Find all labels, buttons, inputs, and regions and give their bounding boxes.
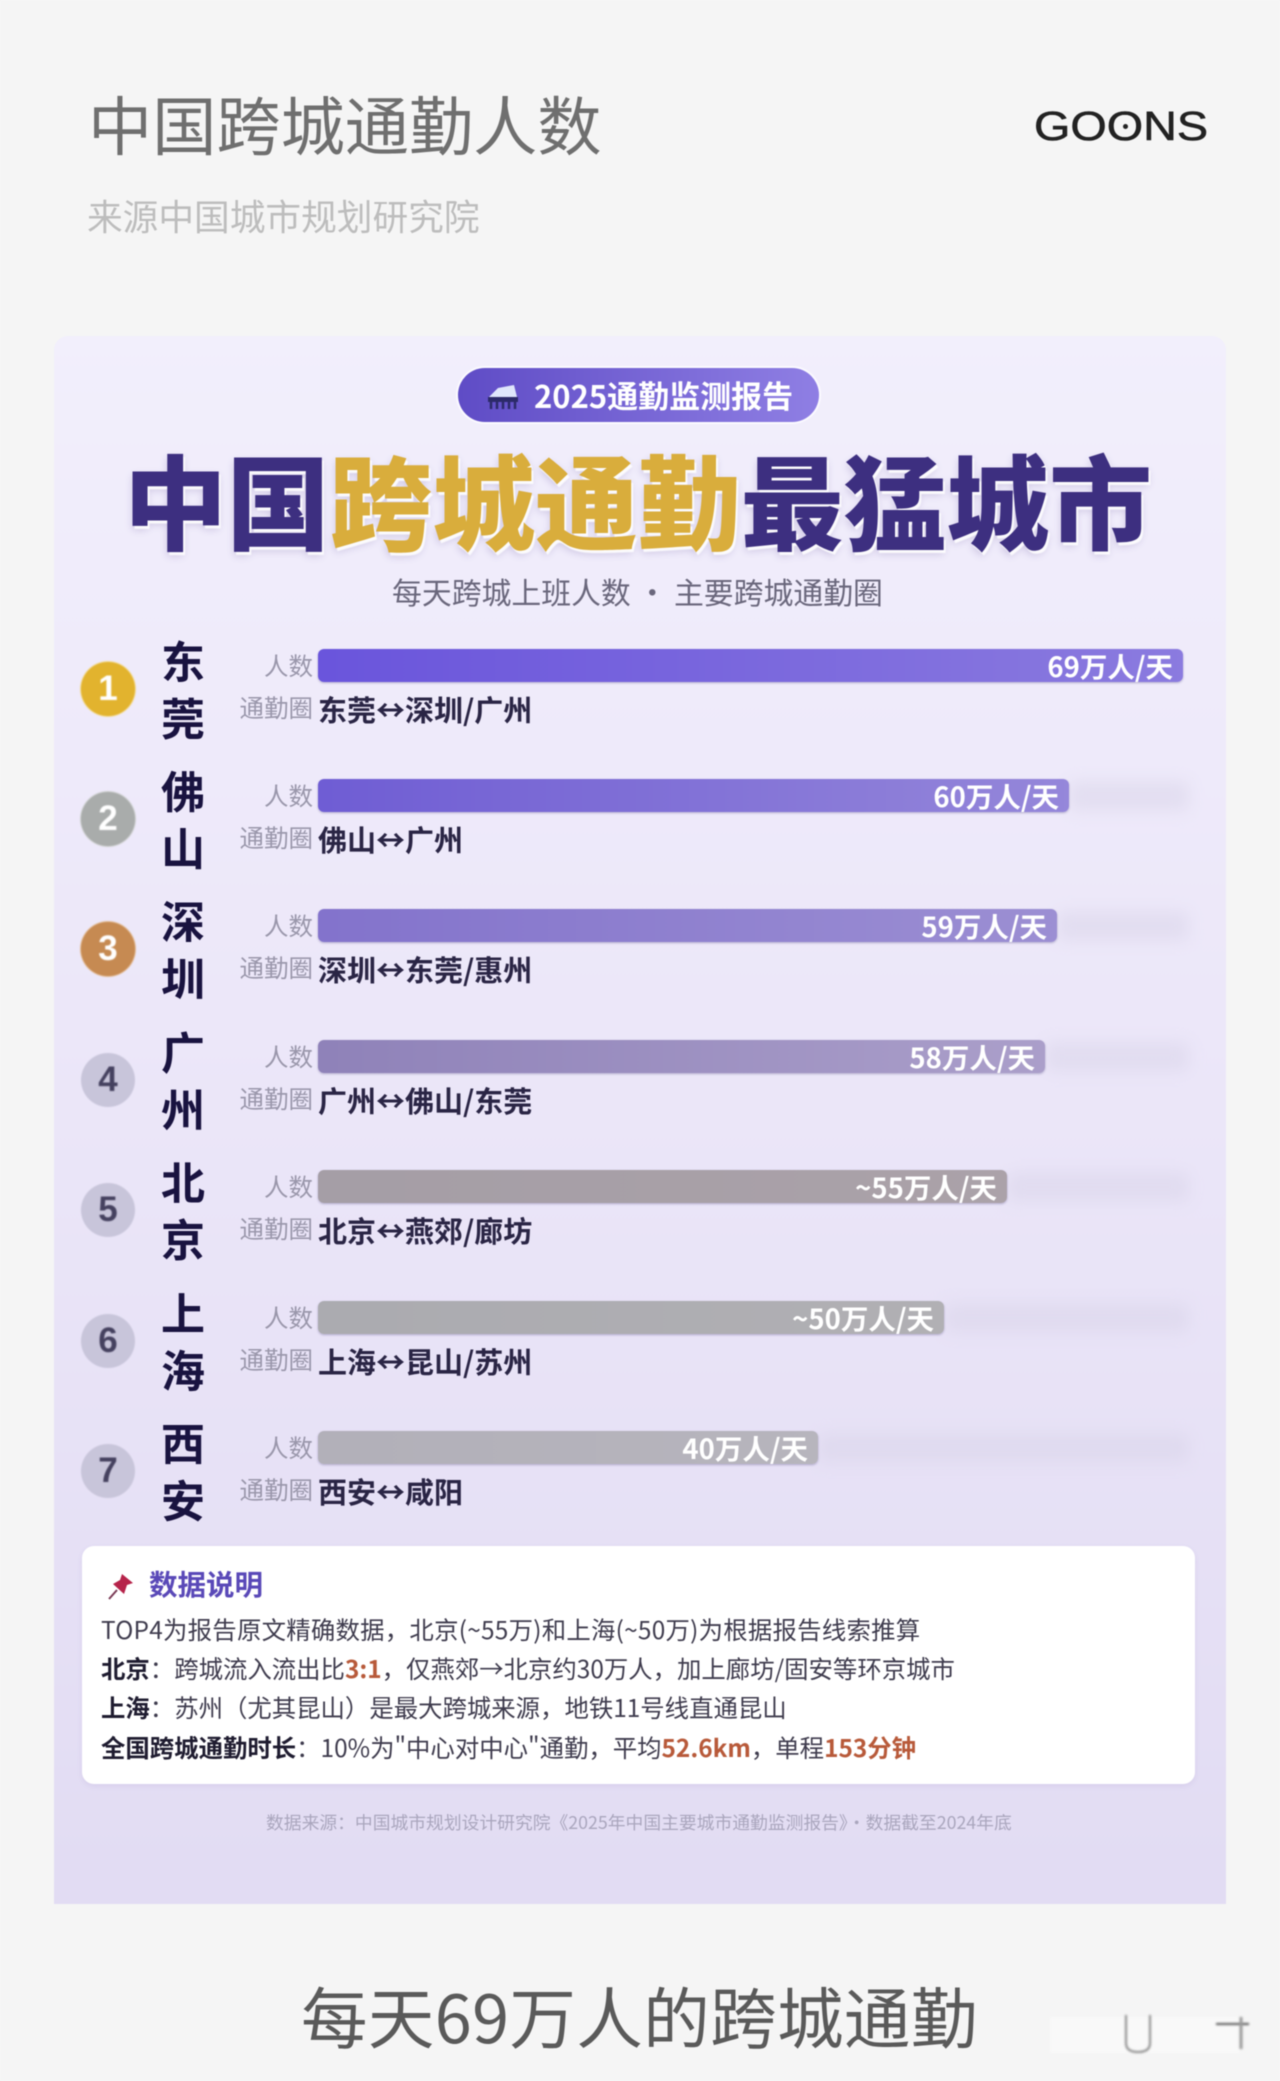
rank badge 6: 6 — [98, 1321, 118, 1360]
rank badge 2 — [81, 792, 135, 846]
city name: 深 — [161, 887, 205, 951]
caption: 每天69万人的跨城通勤 — [301, 1967, 978, 2063]
icon: pin — [108, 1574, 134, 1600]
row 6: 上海 — [80, 1279, 1170, 1400]
label: people: 人数 — [264, 778, 313, 813]
subheading: 每天跨城上班人数 · 主要跨城通勤圈 — [392, 569, 883, 613]
route: 东莞↔深圳/广州 — [318, 688, 532, 730]
bar: 55万: ~55万人/天 — [855, 1166, 997, 1206]
city name: 佛 — [161, 757, 205, 821]
blurred track — [1007, 1172, 1189, 1202]
rank badge 5 — [81, 1183, 135, 1237]
subtitle: source: 来源中国城市规划研究院 — [87, 190, 480, 241]
rank badge 1: 1 — [98, 669, 118, 708]
rank badge 1 — [81, 662, 135, 716]
bar: 40万 — [318, 1431, 818, 1464]
rank badge 2: 2 — [98, 799, 118, 838]
label: circle: 通勤圈 — [240, 1342, 313, 1377]
main heading: 中国跨城通勤最猛城市 — [124, 423, 1152, 572]
label: people: 人数 — [264, 1430, 313, 1465]
city name — [161, 887, 205, 1008]
bar: 69万: 69万人/天 — [1047, 645, 1173, 685]
label: people: 人数 — [264, 908, 313, 943]
city name: 山 — [161, 814, 205, 878]
bar: 58万: 58万人/天 — [909, 1036, 1035, 1076]
bar: 55万 — [318, 1170, 1007, 1203]
note line 3: 上海：苏州（尤其昆山）是最大跨城来源，地铁11号线直通昆山 — [101, 1690, 787, 1725]
note line 1: TOP4为报告原文精确数据，北京(~55万)和上海(~50万)为根据报告线索推算 — [101, 1612, 920, 1647]
city name: 北 — [161, 1148, 205, 1212]
city name — [161, 1279, 205, 1400]
label: circle: 通勤圈 — [240, 950, 313, 985]
bar: 60万: 60万人/天 — [933, 775, 1059, 815]
city name: 圳 — [161, 944, 205, 1008]
row 3: 深圳 — [79, 887, 1182, 1008]
source line: 数据来源：中国城市规划设计研究院《2025年中国主要城市通勤监测报告》·数据截至2024年底 — [266, 1809, 1012, 1835]
note line 4: 全国跨城通勤时长：10%为"中心对中心"通勤，平均52.6km，单程153分钟 — [101, 1730, 916, 1765]
bar: 50万: ~50万人/天 — [792, 1297, 934, 1337]
city name — [161, 627, 205, 748]
city name — [161, 1148, 205, 1269]
route: 上海↔昆山/苏州 — [318, 1340, 532, 1382]
blurred track — [818, 1433, 1189, 1463]
bar: 59万 — [318, 909, 1057, 942]
ranked list — [79, 627, 1184, 1530]
city name — [160, 757, 205, 878]
route: 北京↔燕郊/廊坊 — [318, 1209, 532, 1251]
route: 佛山↔广州 — [318, 818, 463, 860]
watermark artifact — [1124, 2014, 1250, 2054]
icon: train — [488, 384, 518, 410]
rank badge 3 — [81, 922, 135, 976]
row 5: 北京 — [80, 1148, 1176, 1269]
city name — [161, 1018, 205, 1139]
blurred track — [944, 1303, 1189, 1333]
blurred track — [1057, 911, 1189, 941]
notes heading: 数据说明 — [149, 1563, 263, 1604]
title: 中国跨城通勤人数 — [88, 77, 602, 169]
label: circle: 通勤圈 — [240, 820, 313, 855]
label: circle: 通勤圈 — [240, 1211, 313, 1246]
logo: GOONS: GOONS — [1034, 103, 1208, 149]
city name: 莞 — [161, 684, 205, 748]
panel: data notes — [82, 1546, 1195, 1784]
rank badge 7: 7 — [98, 1451, 118, 1490]
city name: 上 — [161, 1279, 205, 1343]
city name: 东 — [161, 627, 205, 691]
bar: 69万 — [318, 649, 1183, 682]
rank badge 7 — [81, 1444, 135, 1498]
rank badge 6 — [81, 1314, 135, 1368]
bar: 59万: 59万人/天 — [921, 905, 1047, 945]
city name: 广 — [161, 1018, 205, 1082]
badge text: 2025通勤监测报告 — [534, 372, 793, 417]
bar: 50万 — [318, 1301, 944, 1334]
label: circle: 通勤圈 — [240, 1472, 313, 1507]
label: people: 人数 — [264, 1169, 313, 1204]
city name: 西 — [161, 1409, 205, 1473]
city name: 京 — [161, 1205, 205, 1269]
bar: 60万 — [318, 779, 1069, 812]
label: people: 人数 — [264, 648, 313, 683]
route: 西安↔咸阳 — [318, 1470, 463, 1512]
rank badge 5: 5 — [98, 1190, 118, 1229]
blurred track — [1045, 1042, 1189, 1072]
city name: 海 — [161, 1336, 205, 1400]
city name: 州 — [161, 1075, 205, 1139]
label: circle: 通勤圈 — [240, 1081, 313, 1116]
note line 2: 北京：跨城流入流出比3:1，仅燕郊→北京约30万人，加上廊坊/固安等环京城市 — [101, 1651, 955, 1686]
rank badge 4 — [81, 1053, 135, 1107]
bar: 58万 — [318, 1040, 1045, 1073]
city name: 安 — [161, 1466, 205, 1530]
row 2: 佛山 — [80, 757, 1184, 878]
city name — [161, 1409, 205, 1530]
pill badge: report name — [458, 368, 819, 422]
rank badge 4: 4 — [98, 1060, 118, 1099]
rank badge 3: 3 — [98, 929, 118, 968]
label: people: 人数 — [264, 1039, 313, 1074]
label: people: 人数 — [264, 1300, 313, 1335]
bar: 40万: 40万人/天 — [682, 1427, 808, 1467]
blurred track — [1069, 781, 1189, 811]
row 4: 广州 — [80, 1018, 1182, 1139]
route: 广州↔佛山/东莞 — [318, 1079, 532, 1121]
row 1: 东莞 — [79, 627, 1184, 748]
label: circle: 通勤圈 — [240, 690, 313, 725]
panel: infographic poster — [54, 336, 1226, 1904]
route: 深圳↔东莞/惠州 — [318, 948, 532, 990]
row 7: 西安 — [80, 1409, 820, 1530]
